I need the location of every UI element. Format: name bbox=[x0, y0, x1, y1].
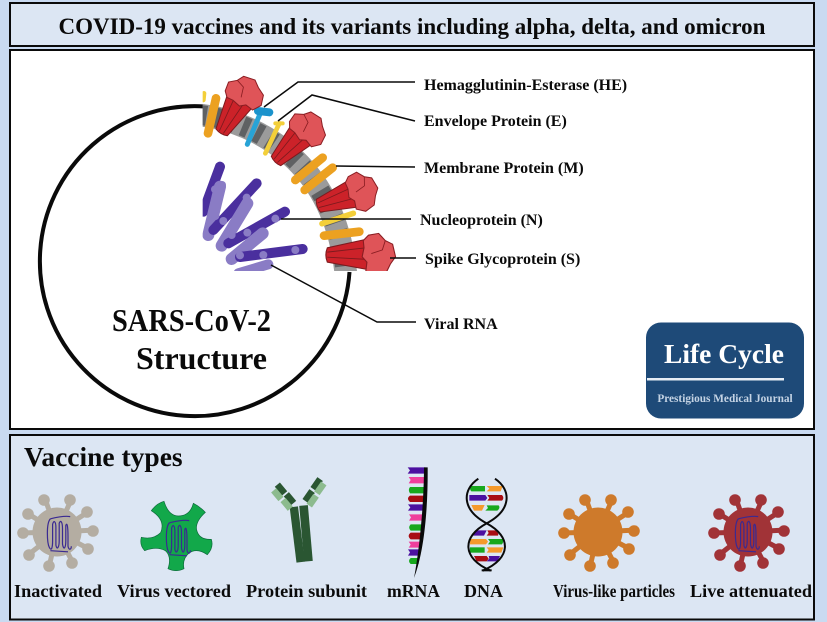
component labels: Hemagglutinin-Esterase (HE) bbox=[424, 77, 627, 94]
icon: mRNA bbox=[408, 467, 428, 578]
journal logo bbox=[646, 322, 804, 418]
vaccine labels: DNA bbox=[464, 581, 503, 601]
vaccine labels: Live attenuated bbox=[690, 581, 812, 601]
icon: virus-like particles bbox=[558, 494, 640, 572]
component labels: Viral RNA bbox=[424, 316, 498, 333]
membrane proteins bbox=[203, 93, 359, 236]
panel: vaccine types bbox=[10, 435, 814, 620]
icon: protein subunit bbox=[271, 477, 327, 563]
component labels: Spike Glycoprotein (S) bbox=[425, 251, 580, 268]
component labels: Nucleoprotein (N) bbox=[420, 212, 543, 229]
nucleoproteins bbox=[203, 167, 303, 273]
circle outline of virus bbox=[40, 106, 349, 416]
vaccine types heading: Vaccine types bbox=[24, 441, 183, 472]
vaccine labels: Protein subunit bbox=[246, 581, 367, 601]
component labels bbox=[420, 77, 627, 333]
title bbox=[10, 3, 814, 46]
icon: virus vectored bbox=[141, 501, 212, 571]
structure heading: Structure bbox=[136, 340, 267, 376]
vaccine labels: Inactivated bbox=[14, 581, 102, 601]
journal logo: Prestigious Medical Journal bbox=[657, 393, 793, 405]
leader lines bbox=[264, 82, 416, 322]
structure heading bbox=[112, 302, 271, 376]
panel: SARS-CoV-2 structure bbox=[10, 50, 814, 429]
spikes bbox=[215, 76, 264, 136]
virus membrane detail bbox=[200, 69, 396, 277]
journal logo: Life Cycle bbox=[664, 338, 784, 369]
component labels: Envelope Protein (E) bbox=[424, 113, 567, 130]
structure heading: SARS-CoV-2 bbox=[112, 302, 271, 338]
icon: inactivated bbox=[17, 494, 99, 572]
vaccine labels: mRNA bbox=[387, 581, 440, 601]
component labels: Membrane Protein (M) bbox=[424, 160, 584, 177]
vaccine labels bbox=[14, 581, 812, 601]
icon: live attenuated bbox=[708, 494, 790, 572]
icon: DNA bbox=[467, 479, 507, 571]
vaccine labels: Virus vectored bbox=[117, 581, 231, 601]
vaccine labels: Virus-like particles bbox=[553, 581, 675, 601]
membrane band bbox=[200, 115, 346, 275]
title: COVID-19 vaccines and its variants including alpha, delta, and omicron bbox=[59, 14, 766, 39]
